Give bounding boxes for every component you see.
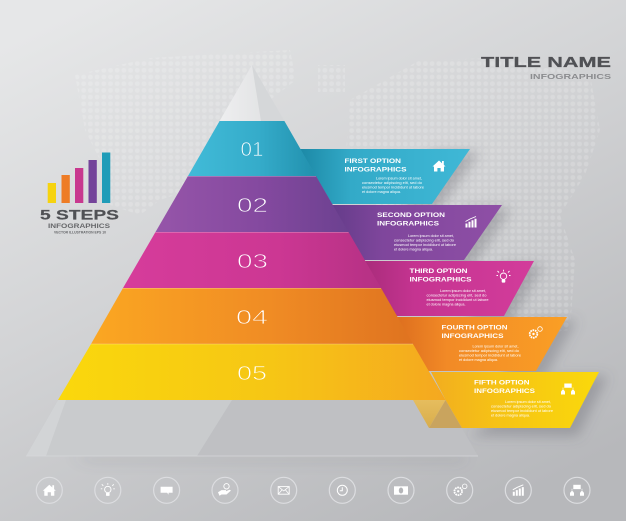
title block: [481, 54, 611, 81]
panel 5 heading: FIFTH OPTION: [474, 380, 530, 386]
panel 5 body text: Lorem ipsum dolor sit amet,: [505, 400, 551, 404]
pyramid band 01: [188, 121, 316, 176]
panel 1 body text: eiusmod tempor incididunt ut labore: [362, 185, 424, 189]
side panel 3: [364, 261, 534, 316]
panel 3 body text: [426, 289, 488, 306]
panel 3 heading: [410, 269, 472, 284]
panel 2 body text: Lorem ipsum dolor sit amet,: [408, 234, 454, 238]
icon: gears: [447, 477, 473, 503]
5 steps label: [40, 206, 119, 234]
panel 5 heading: INFOGRAPHICS: [474, 389, 535, 395]
panel 4 heading: [442, 326, 508, 340]
icon: chat: [154, 477, 180, 503]
panel 2 heading: [377, 213, 445, 228]
panel 5 body text: et dolore magna aliqua.: [491, 414, 530, 418]
number 04: 04: [236, 307, 268, 329]
side panel 1: [300, 149, 470, 204]
5 steps label: VECTOR ILLUSTRATION EPS 10: [54, 230, 106, 234]
number 01: 01: [240, 139, 264, 161]
icon: org chart: [561, 384, 575, 394]
glass pyramid base: [26, 400, 478, 456]
icon: bulb: [95, 477, 121, 503]
title block: TITLE NAME: [481, 54, 611, 71]
panel 1 heading: INFOGRAPHICS: [344, 168, 406, 174]
panel 3 body text: Lorem ipsum dolor sit amet,: [440, 289, 486, 293]
panel 2 heading: SECOND OPTION: [377, 213, 445, 219]
panel 5 heading: [474, 380, 535, 395]
bottom icon row: [36, 477, 590, 503]
panel 4 heading: INFOGRAPHICS: [442, 334, 504, 340]
panel 5 body text: [491, 400, 553, 418]
panel 3 body text: et dolore magna aliqua.: [426, 302, 466, 306]
panel 3 body text: eiusmod tempor incididunt ut labore: [426, 298, 488, 302]
panel 5 body text: eiusmod tempor incididunt ut labore: [491, 409, 553, 413]
side panel 4: [396, 317, 567, 371]
5 steps label: 5 STEPS: [40, 206, 119, 222]
icon: clock: [329, 477, 355, 503]
panel 2 body text: [394, 234, 456, 252]
icon: org chart: [564, 477, 590, 503]
panel 4 body text: eiusmod tempor incididunt ut labore: [459, 354, 521, 358]
pyramid band 02: [156, 176, 348, 232]
icon: gears: [530, 327, 542, 338]
fold under panel 5: [413, 400, 462, 428]
icon: bar chart: [466, 216, 476, 228]
number 02: 02: [237, 195, 268, 217]
panel 1 body text: [362, 176, 424, 194]
pyramid band 03: [123, 232, 381, 288]
panel 4 body text: Lorem ipsum dolor sit amet,: [472, 344, 518, 348]
icon: money: [388, 477, 414, 503]
glass pyramid apex: [220, 65, 284, 121]
panel 1 body text: et dolore magna aliqua.: [362, 190, 401, 194]
subtitle: INFOGRAPHICS: [530, 72, 611, 81]
panel 1 body text: Lorem ipsum dolor sit amet,: [376, 176, 422, 180]
icon: mail: [271, 477, 297, 503]
panel 4 body text: [459, 344, 521, 362]
drop shadows: [70, 152, 608, 463]
panel 4 body text: consectetur adipiscing elit, sed do: [459, 349, 519, 353]
side panel 5: [431, 372, 599, 428]
number 03: 03: [237, 251, 268, 273]
pyramid band 04: [91, 288, 413, 344]
icon: house: [432, 160, 446, 172]
icon: hand with coin: [212, 477, 238, 503]
5 steps label: INFOGRAPHICS: [48, 223, 111, 230]
icon: chart: [505, 477, 531, 503]
panel 4 heading: FOURTH OPTION: [442, 326, 508, 332]
panel 1 body text: consectetur adipiscing elit, sed do: [362, 181, 422, 185]
side panel 2: [332, 205, 502, 260]
icon: light bulb: [496, 270, 510, 283]
panel 4 body text: et dolore magna aliqua.: [459, 358, 498, 362]
number 05: 05: [237, 363, 267, 385]
panel 1 heading: FIRST OPTION: [344, 159, 401, 165]
pyramid band 05: [58, 344, 446, 400]
panel 2 body text: et dolore magna aliqua.: [394, 248, 433, 252]
mini bar chart: [48, 152, 110, 203]
panel 3 heading: INFOGRAPHICS: [410, 278, 472, 284]
panel 3 body text: consectetur adipiscing elit, sed do: [426, 294, 486, 298]
panel 2 body text: consectetur adipiscing elit, sed do: [394, 238, 454, 242]
panel 2 body text: eiusmod tempor incididunt ut labore: [394, 243, 456, 247]
panel 2 heading: INFOGRAPHICS: [377, 222, 439, 228]
dotted world map: [472, 143, 594, 320]
icon: home: [36, 477, 62, 503]
panel 5 body text: consectetur adipiscing elit, sed do: [491, 404, 551, 408]
panel 1 heading: [344, 159, 406, 174]
panel 3 heading: THIRD OPTION: [410, 269, 468, 275]
